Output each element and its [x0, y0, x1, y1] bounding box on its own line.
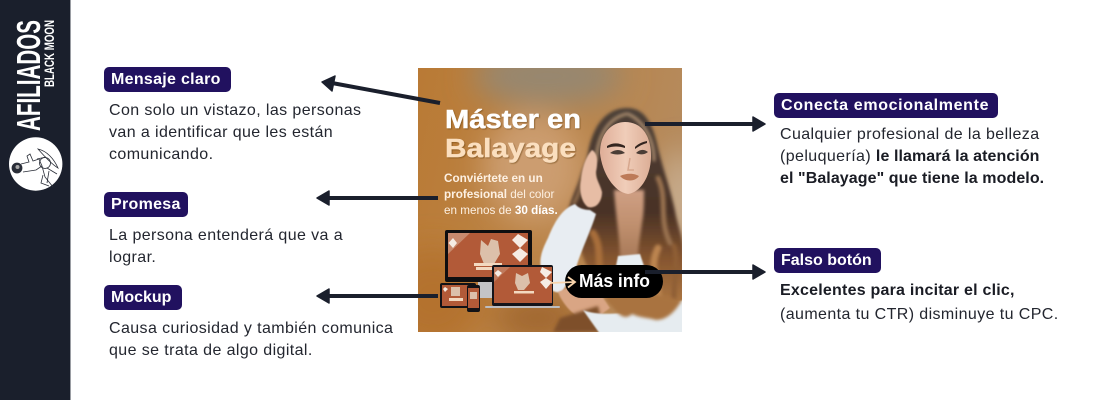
text: Promesa description: La persona entenderá que va a — [109, 227, 343, 244]
ad headline: Máster en — [445, 106, 581, 134]
panel: ad creative — [418, 68, 682, 332]
arrow: to Mockup — [317, 289, 438, 303]
tag: Conecta emocionalmente: Conecta emocionalmente — [781, 97, 989, 114]
ad subheadline: en menos de 30 días. — [444, 204, 558, 217]
text: Falso botón description: (aumenta tu CTR) disminuye tu CPC. — [780, 306, 1059, 323]
text: Mensaje claro description: comunicando. — [109, 146, 213, 163]
tag: Conecta emocionalmente — [774, 93, 998, 118]
hand — [580, 150, 602, 207]
mockup: devices — [440, 230, 560, 312]
text: Conecta description: (peluquería) le llamará la atención — [780, 148, 1040, 165]
lower body shade — [553, 306, 604, 332]
text: Mensaje claro description — [109, 102, 361, 163]
text: Mensaje claro description: van a identificar que les están — [109, 124, 333, 141]
text: Mockup description: que se trata de algo digital. — [109, 342, 313, 359]
button: Más info — [550, 265, 663, 298]
falling hair ends — [609, 295, 682, 322]
tag: Promesa: Promesa — [111, 196, 181, 213]
tag: Promesa — [104, 192, 188, 217]
arrow: to Mensaje claro — [322, 76, 440, 103]
ad subheadline: Conviértete en un — [444, 172, 543, 185]
lower sleeve — [583, 300, 684, 334]
sleeve — [540, 204, 596, 292]
model photo — [540, 108, 684, 334]
text: Conecta description: Cualquier profesional de la belleza — [780, 126, 1040, 143]
forearm — [558, 288, 610, 314]
ad headline: Balayage — [445, 135, 576, 163]
tag: Mockup — [104, 285, 182, 310]
tablet — [440, 283, 476, 308]
text: Mockup description — [109, 320, 393, 359]
laptop — [492, 265, 553, 306]
ad subheadline: profesional del color — [444, 188, 555, 201]
arrow: to Promesa — [317, 191, 438, 205]
text: Conecta description: el "Balayage" que tiene la modelo. — [780, 170, 1044, 187]
text: Mockup description: Causa curiosidad y también comunica — [109, 320, 393, 337]
ad headline — [445, 106, 581, 163]
button: Más info: Más info — [579, 271, 650, 291]
ad background — [418, 68, 682, 332]
tag: Mensaje claro: Mensaje claro — [111, 71, 221, 88]
phone — [467, 285, 480, 312]
neck and chest — [614, 190, 644, 258]
sidebar wordmark — [10, 20, 57, 131]
sidebar: brand strip — [0, 0, 71, 400]
text: Conecta description — [780, 126, 1044, 187]
tag: Falso botón — [774, 248, 881, 273]
hair back — [568, 108, 684, 316]
arrow: to Conecta emocionalmente — [645, 117, 765, 131]
face — [600, 122, 651, 194]
ad subheadline — [444, 172, 558, 217]
icon: astronaut logo — [9, 137, 62, 191]
tag: Mensaje claro — [104, 67, 231, 92]
tag: Falso botón: Falso botón — [781, 252, 872, 269]
text: Promesa description — [109, 227, 343, 266]
text: Mensaje claro description: Con solo un vistazo, las personas — [109, 102, 361, 119]
text: Promesa description: lograr. — [109, 249, 156, 266]
text: Falso botón description: Excelentes para incitar el clic, — [780, 282, 1015, 299]
tag: Mockup: Mockup — [111, 289, 171, 306]
arrow: to Falso botón — [645, 265, 765, 279]
hair highlights — [574, 114, 676, 313]
monitor — [478, 282, 492, 298]
text: Falso botón description — [780, 282, 1059, 323]
white top — [616, 254, 644, 266]
